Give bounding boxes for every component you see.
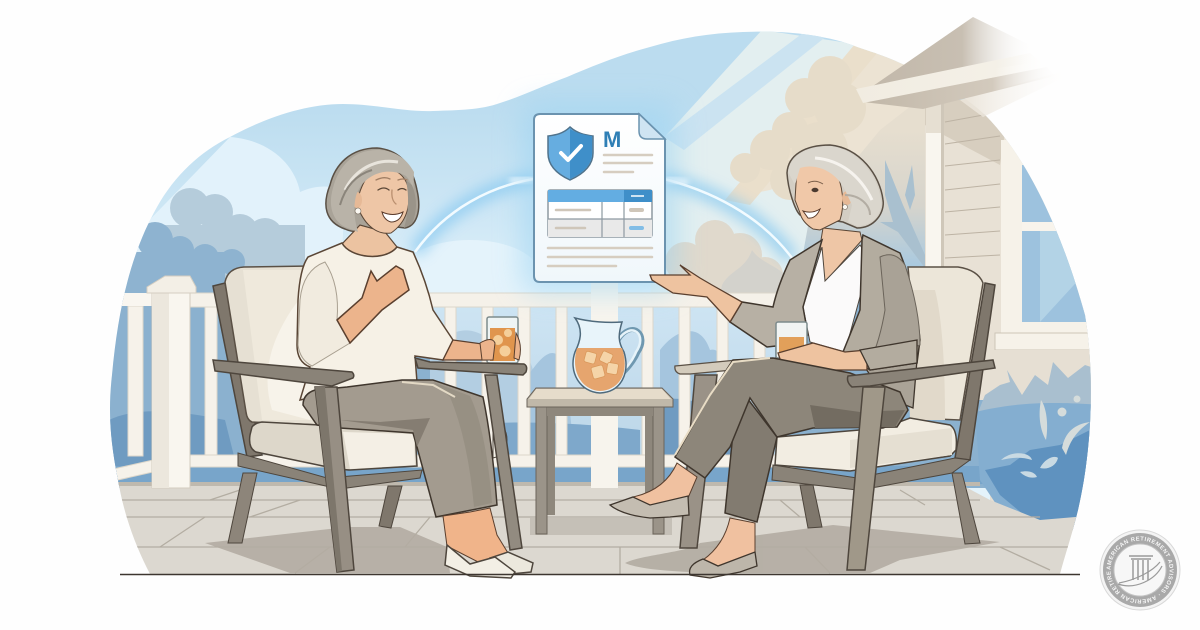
ground line xyxy=(120,574,1080,576)
balusters xyxy=(128,306,765,456)
neck xyxy=(342,225,397,257)
right armrest post xyxy=(485,375,522,550)
railing post xyxy=(147,276,196,488)
column emblem xyxy=(1118,556,1162,586)
background scene xyxy=(100,20,1101,576)
glass xyxy=(487,317,518,363)
left chair right armrest xyxy=(415,358,527,375)
eye and smile xyxy=(812,188,818,192)
ear and earring xyxy=(842,191,852,205)
seat frame xyxy=(238,453,422,488)
center post xyxy=(591,282,618,488)
tree, lower background xyxy=(666,220,783,290)
glass xyxy=(776,322,807,358)
right woman xyxy=(650,145,920,408)
porch floor xyxy=(100,482,1100,576)
window xyxy=(1001,140,1088,336)
face xyxy=(795,165,843,230)
cushion side xyxy=(493,421,507,458)
left woman pants xyxy=(303,380,533,578)
back legs xyxy=(800,485,822,528)
mini table xyxy=(548,190,652,237)
shoe and ankle, lower xyxy=(703,518,755,570)
hair front xyxy=(331,150,414,232)
neck xyxy=(820,228,862,282)
sky xyxy=(136,32,1018,500)
upper thigh xyxy=(675,358,908,478)
hair back xyxy=(787,145,883,228)
tree, right background xyxy=(730,56,866,200)
cardigan hem xyxy=(860,360,917,408)
cardigan xyxy=(843,235,920,370)
right woman pants xyxy=(610,358,908,578)
pale cloud under arc xyxy=(415,240,528,276)
protective glow arc xyxy=(415,178,792,258)
sweater xyxy=(297,243,453,400)
eyes and smile xyxy=(376,178,407,204)
top rail xyxy=(190,293,780,307)
text lines xyxy=(604,155,652,172)
fingers xyxy=(480,333,520,360)
cloud, upper left xyxy=(137,137,343,260)
window sill xyxy=(995,333,1095,350)
floor shadows xyxy=(205,518,1000,573)
seat frame xyxy=(772,458,970,490)
left front post xyxy=(680,375,717,548)
bushes, left background xyxy=(115,188,305,302)
side table xyxy=(527,388,673,534)
lower text lines xyxy=(548,248,652,266)
light rays xyxy=(666,32,925,272)
house siding xyxy=(925,100,1101,520)
right forearm xyxy=(443,340,493,360)
icon: shield with check xyxy=(548,127,593,180)
garden bush, bottom right xyxy=(978,362,1091,530)
iced tea pitcher xyxy=(573,318,642,393)
legs xyxy=(443,508,508,563)
sleeve cuff xyxy=(860,340,917,370)
shoes xyxy=(490,552,533,575)
forearm and hand on chest xyxy=(337,266,409,343)
ear and earring xyxy=(352,192,362,208)
lower leg xyxy=(725,398,777,522)
seal text: AMERICAN RETIREMENT ADVISORS · AMERICAN RETIREMENT ADVISORS xyxy=(1106,536,1174,604)
blue strip under railing xyxy=(100,466,1100,484)
shirt xyxy=(803,245,870,352)
reaching hand xyxy=(650,265,742,322)
bottom rail xyxy=(190,455,810,467)
document card xyxy=(522,104,677,292)
seat cushion xyxy=(250,422,417,470)
porch column xyxy=(926,133,941,266)
left woman xyxy=(297,148,520,400)
right chair front post and armrest xyxy=(847,360,995,570)
right chair, back parts xyxy=(675,267,995,548)
hand on glass xyxy=(778,343,867,370)
crossed leg foot xyxy=(633,463,697,508)
seat cushion xyxy=(775,418,956,471)
hair back xyxy=(326,148,419,232)
porch railing xyxy=(100,276,810,488)
left chair front post and armrest xyxy=(213,360,354,572)
blue tree trunk xyxy=(880,160,925,268)
hair front xyxy=(788,146,881,226)
left chair, back parts xyxy=(213,266,522,550)
distant shrubs behind railing xyxy=(100,298,1100,488)
sleeve shading xyxy=(298,262,350,366)
house roof fading out of the scene xyxy=(856,17,1067,117)
face xyxy=(358,168,409,233)
letter M: M xyxy=(603,127,621,152)
back leg xyxy=(379,486,402,528)
